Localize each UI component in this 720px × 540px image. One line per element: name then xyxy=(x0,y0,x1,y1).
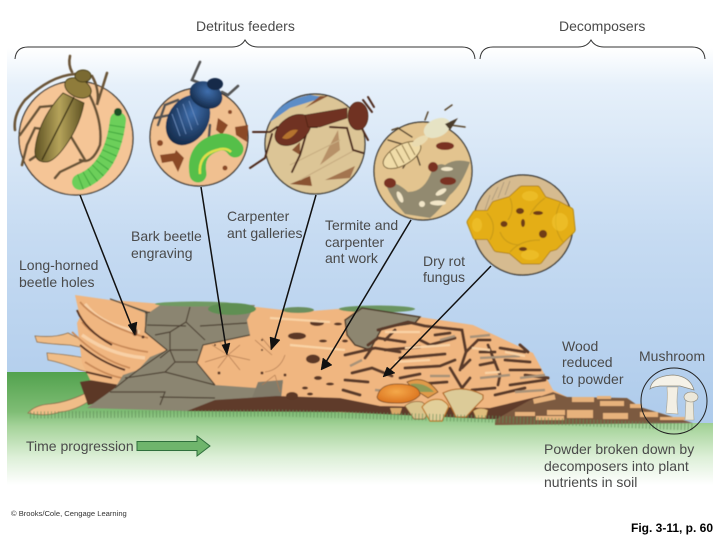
bark cracks xyxy=(110,299,250,405)
green larva xyxy=(80,120,118,182)
arrow: time progression xyxy=(137,436,210,456)
circle: bark beetle and larva xyxy=(150,62,248,186)
label: termite and carpenter ant work: Termite and xyxy=(325,217,398,233)
circle: white mushrooms xyxy=(641,368,707,434)
fungus lumps xyxy=(487,198,563,252)
wood grain on left end xyxy=(72,302,148,378)
beetle legs and antennae xyxy=(15,56,107,178)
lighter wood highlights xyxy=(270,318,525,373)
sky gradient xyxy=(7,48,713,424)
termite thorax and head xyxy=(410,133,430,149)
label: carpenter ant galleries: ant galleries xyxy=(227,225,302,241)
engraving marks xyxy=(157,110,248,172)
wood marks xyxy=(290,96,355,186)
green larva xyxy=(197,142,235,174)
beetle legs xyxy=(155,62,238,155)
bracket mushrooms xyxy=(377,380,488,421)
circle: dry rot fungus xyxy=(470,175,573,275)
label: bark beetle engraving: engraving xyxy=(131,245,192,261)
figure reference: Fig. 3-11, p. 60 xyxy=(631,521,713,535)
background panel: sky and grass xyxy=(7,48,713,485)
beetle wing stripes xyxy=(172,101,198,136)
brace: detritus feeders xyxy=(15,40,475,59)
label: long-horned beetle holes: Long-horned xyxy=(19,257,98,273)
tan gilled caps xyxy=(405,402,432,419)
brace: decomposers xyxy=(480,40,705,59)
bark fragment lower centre xyxy=(252,380,283,400)
ant body xyxy=(269,102,368,152)
label: powder broken down: Powder broken down by xyxy=(544,441,694,457)
beetle body xyxy=(157,87,219,153)
termite legs xyxy=(388,105,465,168)
label: mushroom: Mushroom xyxy=(639,348,705,364)
termite galleries xyxy=(385,161,470,218)
arrow: dry rot fungus xyxy=(383,266,491,377)
fungus dark pits xyxy=(500,208,547,251)
label: bark beetle engraving: Bark beetle xyxy=(131,228,202,244)
wood grain behind fungus xyxy=(485,181,510,210)
label: dry rot fungus: Dry rot xyxy=(423,253,465,269)
label: wood reduced to powder: reduced xyxy=(562,354,613,370)
log wood body xyxy=(75,295,567,418)
termite abdomen xyxy=(379,136,425,174)
label: carpenter ant galleries: Carpenter xyxy=(227,208,290,224)
label: time progression: Time progression xyxy=(26,438,134,454)
orange cap xyxy=(377,384,420,403)
pointer arrows xyxy=(80,187,491,377)
label: wood reduced to powder: to powder xyxy=(562,371,624,387)
arrow: bark beetle engraving xyxy=(201,187,230,355)
label: long-horned beetle holes: beetle holes xyxy=(19,274,95,290)
circle: long-horned beetle and larva xyxy=(15,56,133,195)
label: dry rot fungus: fungus xyxy=(423,269,465,285)
soil band under the log xyxy=(187,396,570,420)
arrow: long-horned beetle holes xyxy=(80,195,137,335)
grey bark section xyxy=(87,299,283,411)
label: powder broken down: nutrients in soil xyxy=(544,474,637,490)
arrow: carpenter ant galleries xyxy=(270,195,316,350)
label: wood reduced to powder: Wood xyxy=(562,338,598,354)
fungus mass xyxy=(470,189,572,261)
beetle thorax and head xyxy=(62,74,94,102)
decaying log xyxy=(28,295,693,427)
fungus highlights xyxy=(472,191,568,260)
wood gallery blotches xyxy=(132,320,348,400)
log roots xyxy=(28,333,110,415)
circle: carpenter ant xyxy=(250,94,374,194)
heading: Detritus feeders: Detritus feeders xyxy=(196,18,295,34)
wood highlights on left end xyxy=(82,304,145,358)
sky corner in circle xyxy=(270,95,325,122)
grey shading in the wood blocks xyxy=(350,335,545,392)
grass ground xyxy=(7,372,713,485)
wood powder pile xyxy=(495,392,693,425)
ant legs and antennae xyxy=(250,97,374,172)
rear cap xyxy=(407,380,438,398)
large mushroom xyxy=(666,387,678,414)
circle: termite xyxy=(374,105,472,220)
arrow: termite and carpenter ant work xyxy=(321,220,411,370)
label: termite and carpenter ant work: carpenter xyxy=(325,234,384,250)
wood grain xyxy=(290,140,355,180)
small mushroom xyxy=(685,400,694,420)
beetle head xyxy=(185,76,227,114)
beetle wings xyxy=(35,93,84,162)
wood block cracks on the right xyxy=(343,322,548,395)
termite larvae xyxy=(395,167,453,207)
label: powder broken down: decomposers into plant xyxy=(544,458,689,474)
bark beetle engraving xyxy=(205,338,285,392)
dark base behind left end xyxy=(80,375,125,405)
grass tufts along the log base xyxy=(30,413,693,427)
grey bark strip on right xyxy=(345,308,420,350)
label: termite and carpenter ant work: ant work xyxy=(325,250,379,266)
moss on log top xyxy=(155,302,415,315)
copyright credit: © Brooks/Cole, Cengage Learning xyxy=(11,509,127,518)
heading: Decomposers: Decomposers xyxy=(559,18,645,34)
